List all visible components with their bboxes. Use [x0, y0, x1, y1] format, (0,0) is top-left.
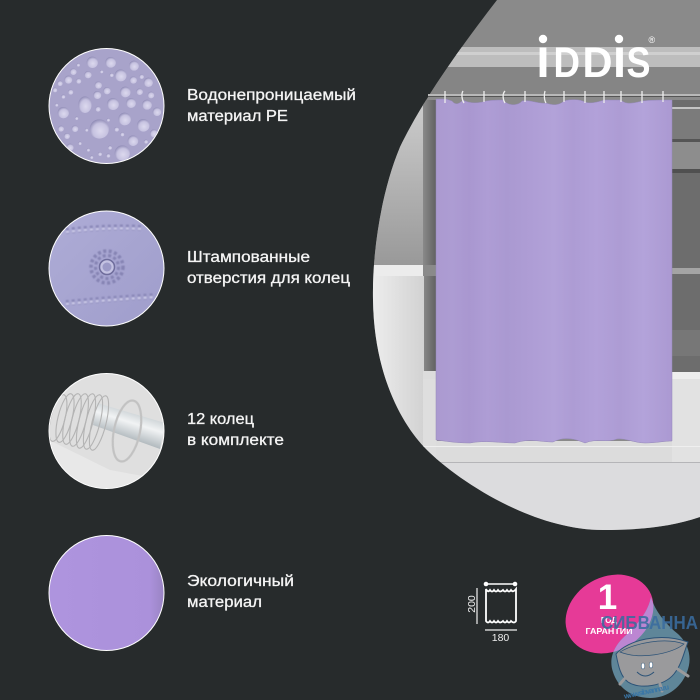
- feature text: waterproof PE: Водонепроницаемый: [187, 87, 356, 104]
- feature circle: stamped ring holes: [48, 210, 165, 327]
- IDDIS logo: I: [536, 39, 550, 87]
- IDDIS logo: D: [582, 39, 612, 87]
- feature circle: water drops: [48, 48, 165, 164]
- IDDIS logo: I: [613, 39, 626, 87]
- watermark: smiling bathtub in a water drop: [616, 638, 688, 700]
- feature text: twelve rings: [187, 411, 284, 449]
- feature text: stamped holes: отверстия для колец: [187, 270, 350, 287]
- warranty badge: ГАРАНТИИ: [586, 626, 632, 636]
- feature text: waterproof PE: [187, 87, 356, 125]
- feature text: stamped holes: [187, 249, 350, 287]
- feature text: eco: материал: [187, 594, 262, 611]
- dimensions icon: 200: [466, 595, 478, 613]
- IDDIS logo: [536, 35, 656, 87]
- feature text: eco: [187, 573, 294, 611]
- lilac shower curtain: [436, 99, 672, 443]
- feature circle: twelve rings on a rod: [45, 373, 165, 489]
- warranty badge: 1: [598, 578, 617, 617]
- warranty badge: [566, 574, 690, 698]
- warranty badge: ГОД: [601, 616, 617, 625]
- IDDIS logo: S: [626, 39, 650, 87]
- feature text: waterproof PE: материал PE: [187, 108, 288, 125]
- feature text: stamped holes: Штампованные: [187, 249, 310, 266]
- curtain rings: [445, 91, 663, 103]
- dimensions icon: [466, 582, 517, 644]
- feature text: eco: Экологичный: [187, 573, 294, 590]
- dimensions icon: 180: [492, 632, 509, 644]
- IDDIS logo: ®: [648, 35, 656, 45]
- feature circle: eco material swatch: [48, 535, 164, 651]
- feature text: twelve rings: 12 колец: [187, 411, 254, 428]
- feature text: twelve rings: в комплекте: [187, 432, 284, 449]
- shower rod: [428, 94, 700, 97]
- bathroom photo in a large round frame: [370, 0, 700, 533]
- IDDIS logo: D: [554, 39, 580, 87]
